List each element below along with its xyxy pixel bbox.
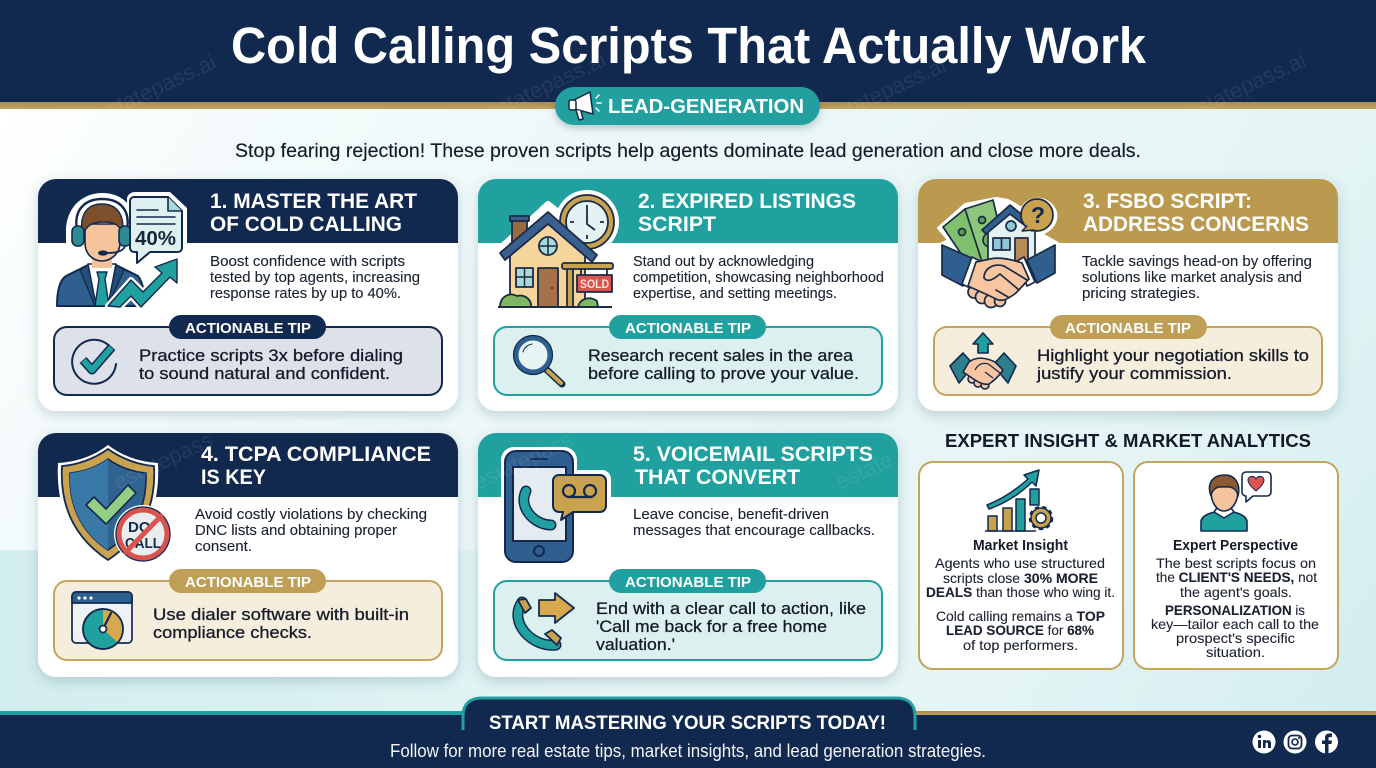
icon: shield with do not call [58, 445, 172, 564]
body text: response rates by up to 40%. [210, 286, 401, 302]
icon: instagram [1284, 730, 1306, 754]
body text: pricing strategies. [1082, 286, 1200, 302]
icon: money, house and handshake: ? [1031, 202, 1045, 228]
heading: 2. EXPIRED LISTINGS [638, 189, 856, 213]
call to action text: START MASTERING YOUR SCRIPTS TODAY! [489, 713, 886, 734]
tip label: ACTIONABLE TIP [185, 575, 311, 591]
body text: Tackle savings head-on by offering [1082, 254, 1312, 270]
expert text [1151, 556, 1319, 660]
callout: actionable tip [54, 315, 442, 395]
expert text: the agent's goals. [1180, 585, 1292, 600]
body text [210, 254, 420, 302]
icon: agent with heart speech bubble [1201, 472, 1271, 531]
icon: check mark circle [72, 340, 116, 384]
heading: IS KEY [201, 465, 266, 489]
tip text: to sound natural and confident. [139, 364, 390, 383]
infographic canvas: estatepass.ai [482, 47, 610, 125]
icon: dialer window with gauge [72, 592, 132, 649]
body text: Stand out by acknowledging [633, 254, 814, 270]
insight text: LEAD SOURCE for 68% [946, 623, 1094, 638]
tip label [1050, 315, 1207, 339]
expert text: key—tailor each call to the [1151, 617, 1319, 632]
tip text [139, 346, 403, 383]
category pill: lead-generation: LEAD-GENERATION [608, 96, 804, 118]
heading: 4. TCPA COMPLIANCE [201, 442, 431, 466]
subheading: Expert Perspective [1173, 538, 1298, 554]
icon: call agent with headset and 40% bubble: 40% [135, 228, 176, 250]
infographic canvas: estate [832, 447, 896, 495]
heading [201, 442, 431, 489]
body text [1082, 254, 1312, 302]
call to action tab [463, 698, 915, 730]
tip text [596, 599, 866, 654]
insight text [926, 556, 1115, 653]
panel: card 4 tcpa compliance [38, 433, 458, 677]
panel: card 3 fsbo script [918, 179, 1338, 411]
panel: card 1 master the art of cold calling [38, 179, 458, 411]
tip text: End with a clear call to action, like [596, 599, 866, 618]
tip text [153, 605, 409, 642]
infographic canvas: estatepass.ai [1182, 47, 1310, 125]
insight text: Agents who use structured [935, 556, 1105, 571]
icon: facebook [1315, 730, 1338, 754]
body text [633, 507, 875, 539]
icon: handset with arrow [518, 593, 574, 645]
tip label [169, 569, 326, 593]
category pill: lead-generation [555, 87, 820, 125]
tip text [1036, 346, 1309, 383]
body text: Boost confidence with scripts [210, 254, 405, 270]
body text: competition, showcasing neighborhood [633, 270, 884, 286]
panel: expert perspective [1134, 462, 1338, 669]
icon: shield with do not call: CALL [125, 536, 161, 552]
heading [638, 189, 856, 236]
tip text: valuation.' [596, 635, 675, 654]
header band [0, 0, 1376, 109]
icon: money, house and handshake [938, 198, 1058, 312]
icon: house with clock and sold sign: SOLD [580, 279, 609, 291]
icon: call agent with headset and 40% bubble [57, 192, 187, 307]
panel: card 5 voicemail scripts [478, 433, 898, 677]
insight text: of top performers. [963, 638, 1078, 653]
tip label [609, 569, 766, 593]
body text: tested by top agents, increasing [210, 270, 420, 286]
tip text: Practice scripts 3x before dialing [139, 346, 403, 365]
heading: THAT CONVERT [635, 465, 800, 489]
tip text: Use dialer software with built-in [153, 605, 409, 624]
heading: expert insight and market analytics: EXPERT INSIGHT & MARKET ANALYTICS [945, 430, 1311, 451]
icon: house with clock and sold sign [496, 190, 619, 307]
heading: SCRIPT [638, 212, 716, 236]
heading: OF COLD CALLING [210, 212, 402, 236]
expert text: PERSONALIZATION is [1165, 603, 1305, 618]
heading [1083, 189, 1309, 236]
tip text: justify your commission. [1036, 364, 1232, 383]
tip label: ACTIONABLE TIP [185, 321, 311, 337]
heading: 1. MASTER THE ART [210, 189, 417, 213]
expert text: prospect's specific [1176, 631, 1295, 646]
icon: megaphone [569, 92, 601, 120]
icon: phone with voicemail bubble [501, 447, 611, 565]
expert text: situation. [1206, 645, 1265, 660]
tip text: Research recent sales in the area [588, 346, 854, 365]
tip text [588, 346, 859, 383]
body text [195, 507, 427, 555]
body text: solutions like market analysis and [1082, 270, 1302, 286]
body text: Leave concise, benefit-driven [633, 507, 829, 523]
subheading: Market Insight [973, 538, 1068, 554]
footer band [0, 698, 1376, 768]
callout: actionable tip [494, 315, 882, 395]
icon: growth bars with gear [985, 470, 1052, 531]
tip text: 'Call me back for a free home [596, 617, 827, 636]
tip text: Highlight your negotiation skills to [1037, 346, 1309, 365]
insight text: Cold calling remains a TOP [936, 609, 1105, 624]
infographic canvas: estatepass.ai [92, 49, 220, 127]
body text: consent. [195, 539, 252, 555]
callout: actionable tip [494, 569, 882, 660]
tip text: before calling to prove your value. [588, 364, 859, 383]
tip label: ACTIONABLE TIP [625, 321, 751, 337]
title: Cold Calling Scripts That Actually Work [231, 17, 1147, 74]
callout: actionable tip [934, 315, 1322, 395]
expert text: The best scripts focus on [1156, 556, 1316, 571]
heading [210, 189, 417, 236]
follow line: Follow for more real estate tips, market insights, and lead generation strategies. [390, 741, 986, 761]
infographic canvas: estatepass [110, 427, 217, 495]
tip text: compliance checks. [153, 623, 312, 642]
insight text: DEALS than those who wing it. [926, 585, 1115, 600]
infographic canvas: estatepass.ai [822, 52, 950, 130]
tip label [609, 315, 766, 339]
panel: card 2 expired listings script [478, 179, 898, 411]
heading [633, 442, 873, 489]
expert text: the CLIENT'S NEEDS, not [1156, 570, 1317, 585]
body text [633, 254, 884, 302]
infographic canvas: estatepass [470, 427, 577, 495]
icon: linkedin [1252, 730, 1276, 754]
tip label [169, 315, 326, 339]
tip label: ACTIONABLE TIP [625, 575, 751, 591]
body text: Avoid costly violations by checking [195, 507, 427, 523]
icon: handshake with up arrow [950, 333, 1016, 389]
body text: expertise, and setting meetings. [633, 286, 837, 302]
subtitle: Stop fearing rejection! These proven scripts help agents dominate lead generation and close more deals. [235, 140, 1141, 162]
insight text: scripts close 30% MORE [943, 571, 1098, 586]
heading: ADDRESS CONCERNS [1083, 212, 1309, 236]
callout: actionable tip [54, 569, 442, 660]
body text: DNC lists and obtaining proper [195, 523, 397, 539]
heading: 5. VOICEMAIL SCRIPTS [633, 442, 873, 466]
icon: shield with do not call: DO [128, 519, 151, 536]
tip label: ACTIONABLE TIP [1065, 321, 1191, 337]
panel: market insight [919, 462, 1123, 669]
icon: magnifying glass [514, 336, 562, 384]
heading: 3. FSBO SCRIPT: [1083, 189, 1252, 213]
body text: messages that encourage callbacks. [633, 523, 875, 539]
